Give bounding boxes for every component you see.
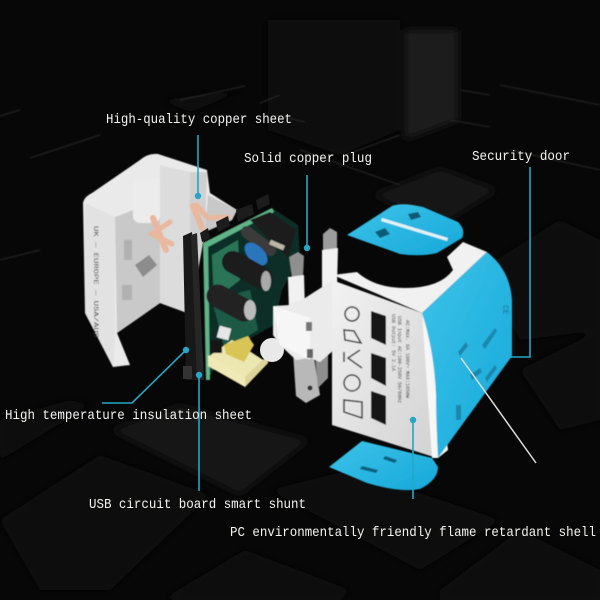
capacitor knob [260, 338, 284, 362]
USB ports [371, 311, 386, 345]
white front face [332, 280, 437, 458]
right-top metal pins [270, 242, 284, 248]
pointer: needle [461, 358, 536, 463]
capacitors [217, 212, 296, 340]
socket slots: CE [500, 305, 509, 315]
callout lines [102, 135, 530, 499]
callout dots [183, 193, 416, 423]
socket slots [456, 305, 509, 420]
label: USB circuit board smart shunt: USB circuit board smart shunt [89, 497, 306, 513]
rating text: USB Input AC:100-250V 50/60Hz [396, 316, 402, 403]
label: solid copper plug: Solid copper plug [244, 151, 372, 167]
shell region text: UK — EUROPE — USA/AUS [92, 226, 99, 338]
label: security door: Security door [472, 149, 570, 165]
white top face [333, 242, 487, 313]
rating text [390, 314, 410, 403]
blue top shutter [347, 204, 463, 255]
label: high temperature insulation sheet: High temperature insulation sheet [5, 408, 252, 424]
blue bottom shutter [329, 441, 438, 490]
circuit board [203, 208, 300, 387]
adapter cube [332, 242, 512, 458]
copper sheets [152, 205, 228, 250]
dark clips behind board [200, 194, 270, 242]
background: faint edge highlights [0, 85, 600, 260]
shell inner ribs [85, 165, 237, 367]
rating text: USB Output: 5V 2.1A [390, 314, 396, 371]
label: high-quality copper sheet: High-quality copper sheet [106, 112, 292, 128]
rating text: AC:Max. 6A 100V~ MAX:1650W [404, 320, 410, 398]
solid copper plug assembly [273, 228, 338, 403]
certification icons [344, 307, 362, 418]
blue side face [422, 252, 512, 458]
left shell [83, 154, 237, 367]
insulation sheet [183, 232, 204, 380]
transformer [208, 336, 268, 387]
